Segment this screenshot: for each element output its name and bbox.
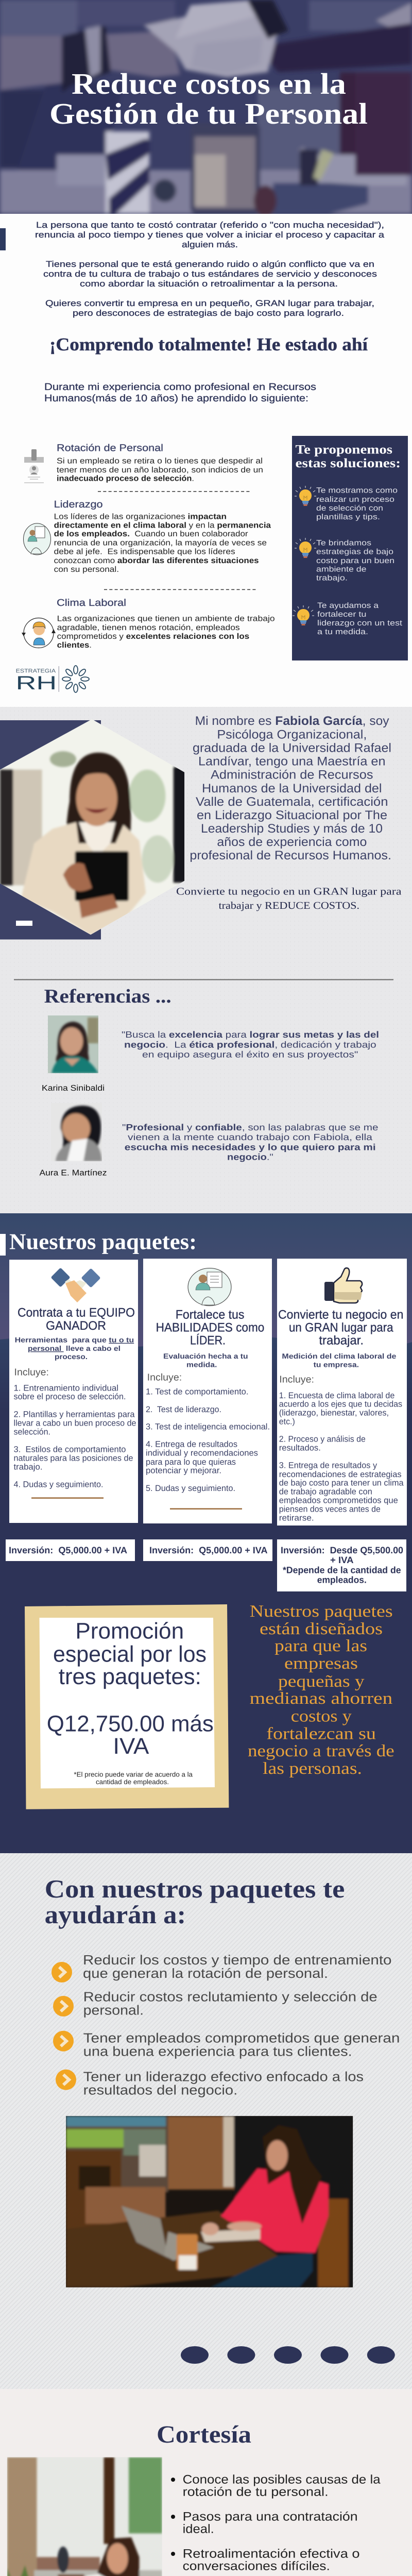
includes list: sobre el proceso de selección.: [13, 1392, 126, 1401]
title: Gestión de tu Personal: [49, 97, 368, 130]
solution 1: de selección con: [316, 504, 383, 513]
solution 1: realizar un proceso: [316, 495, 394, 504]
bio text: años de experiencia como: [217, 835, 367, 849]
body: Las organizaciones que tienen un ambiente de trabajo: [57, 615, 275, 623]
call to action: trabajar y REDUCE COSTOS.: [218, 900, 359, 911]
includes list: 2. Proceso y análisis de: [279, 1434, 366, 1444]
body: con su personal.: [54, 565, 119, 574]
body: directamente en el clima laboral y en la permanencia: [54, 521, 271, 530]
heading: Rotación de Personal: [57, 443, 163, 453]
benefit 1: que generan la rotación de personal.: [83, 1965, 328, 1981]
panel: beneficios: [0, 1853, 412, 2389]
card subtitle: personal lleve a cabo el: [28, 1344, 121, 1352]
testimonial: Karina: [122, 1029, 379, 1059]
logo: Estrategia RH: RH: [16, 672, 57, 693]
icon: clima: [22, 618, 56, 648]
intro text block: pero desconoces de estrategias de bajo costo para lograrlo.: [73, 309, 344, 318]
includes list: 3. Entrega de resultados y: [279, 1461, 377, 1470]
intro text block: como abordar la situación o retroalimentar a la persona.: [80, 279, 338, 289]
testimonial: Aura: negocio .": [227, 1152, 273, 1162]
benefit 3: Tener empleados comprometidos que generan: [83, 2030, 400, 2045]
solution 2: [316, 539, 394, 582]
logo: Estrategia RH: [16, 666, 89, 693]
body: comprometidos y excelentes relaciones con los: [57, 632, 249, 641]
price box 2: [143, 1539, 272, 1561]
panel: soluciones: [292, 436, 408, 660]
session topics: Retroalimentación efectiva o: [183, 2547, 360, 2561]
benefit 4: resultados del negocio.: [83, 2082, 237, 2097]
includes list: 4. Dudas y seguimiento.: [13, 1480, 103, 1489]
includes list: resultados.: [279, 1443, 321, 1452]
solution 3: liderazgo con un test: [317, 619, 403, 628]
includes list: 5. Dudas y seguimiento.: [146, 1484, 235, 1493]
body: [57, 456, 263, 483]
price box 3: *Depende de la cantidad de: [283, 1565, 401, 1575]
icon: chevron 1: [52, 1962, 72, 1982]
card title: GANADOR: [46, 1319, 106, 1333]
includes list: potenciar y mejorar.: [146, 1466, 221, 1476]
includes list: [146, 1372, 270, 1493]
card subtitle: tu empresa.: [314, 1361, 359, 1369]
decoration: five dots: [181, 2346, 395, 2364]
card: habilidades: [143, 1259, 272, 1523]
card title: [156, 1308, 264, 1348]
name: Karina: Karina Sinibaldi: [42, 1084, 105, 1093]
icon: bulb 3: [293, 605, 314, 625]
photo: Fabiola in hexagon: [0, 717, 186, 938]
intro text block: renuncia al poco tiempo y tienes que volver a iniciar el proceso y capacitar a: [35, 230, 385, 240]
text block: paquetes diseñados: [248, 1602, 394, 1778]
panel: paquetes: [0, 1213, 412, 1853]
includes list: selección.: [13, 1428, 50, 1437]
logo: Estrategia RH: ESTRATEGIA: [16, 668, 56, 674]
session topics: rotación de tu personal.: [183, 2485, 329, 2499]
solution 2: trabajo.: [316, 574, 348, 582]
intro text block: alguien más.: [182, 240, 238, 249]
promo price: [47, 1711, 214, 1759]
promo note: *El precio puede variar de acuerdo a la: [74, 1770, 193, 1778]
name: Aura: Aura E. Martínez: [39, 1169, 107, 1178]
heading: te ayudarán: ayudarán a:: [45, 1900, 186, 1929]
benefit 1: Reducir los costos y tiempo de entrenamiento: [83, 1952, 391, 1968]
bio text: Administración de Recursos: [211, 768, 373, 782]
includes list: piensen dos veces antes de: [279, 1505, 381, 1514]
includes list: 1. Entrenamiento individual: [13, 1384, 118, 1393]
solution 1: plantillas y tips.: [316, 513, 380, 521]
bio text: Landívar, tengo una Maestría en: [198, 755, 385, 769]
body: clientes .: [57, 641, 92, 650]
testimonial: Aura: escucha mis necesidades y lo que quiero para mi: [125, 1142, 376, 1153]
includes list: acuerdo a los ejes que tu decidas: [279, 1400, 402, 1409]
card subtitle: Evaluación hecha a tu: [163, 1352, 248, 1360]
card title: un GRAN lugar para: [289, 1321, 393, 1335]
benefit 2: [83, 1989, 377, 2018]
panel: bio: [0, 707, 412, 1213]
text block: paquetes diseñados: están diseñados: [260, 1620, 383, 1638]
includes list: (liderazgo, bienestar, valores,: [279, 1408, 389, 1417]
includes list: 1. Encuesta de clima laboral de: [279, 1391, 394, 1400]
icon: líder: [24, 523, 50, 555]
includes list: Incluye:: [147, 1372, 182, 1383]
heading: te ayudarán: Con nuestros paquetes te: [45, 1874, 345, 1903]
session topics: ideal.: [183, 2522, 214, 2536]
includes list: 2. Plantillas y herramientas para: [13, 1410, 135, 1419]
benefit 1: [83, 1952, 391, 1981]
heading: Clima Laboral: [57, 598, 126, 608]
price box 1: [6, 1539, 135, 1561]
panel: hero: [0, 0, 412, 216]
includes list: etc.): [279, 1417, 295, 1426]
benefit 3: [83, 2030, 400, 2059]
body: Si un empleado se retira o lo tienes que despedir al: [57, 456, 263, 466]
text block: paquetes diseñados: las personas.: [263, 1759, 362, 1778]
includes list: para para lo que quieras: [146, 1458, 236, 1467]
includes list: 1. Test de comportamiento.: [146, 1387, 248, 1397]
heading: cortesía: Cortesía: [157, 2421, 251, 2448]
card subtitle: [282, 1352, 397, 1369]
card title: trabajar.: [319, 1334, 364, 1348]
photo: mujer con laptop: [66, 2116, 353, 2287]
photo: Karina: [48, 1015, 98, 1073]
body: de los empleados. Cuando un buen colaborador: [54, 530, 248, 538]
photo: Aura: [51, 1103, 102, 1161]
price box 1: Inversión: Q5,000.00 + IVA: [9, 1545, 127, 1555]
intro text block: Tienes personal que te está generando ruido o algún conflicto que va en: [46, 260, 374, 269]
body: agradable, tienen menos rotación, empleados: [57, 623, 240, 632]
heading: paquetes: Nuestros paquetes:: [9, 1229, 197, 1254]
card subtitle: Herramientas para que tu o tu: [15, 1336, 134, 1344]
text block: experiencia: [44, 382, 316, 404]
text block: paquetes diseñados: empresas: [284, 1654, 358, 1673]
includes list: retirarse.: [279, 1514, 314, 1523]
card title: [278, 1308, 403, 1348]
icon: chevron 3: [53, 2031, 74, 2052]
heading: estas soluciones:: [296, 456, 401, 470]
card title: [18, 1306, 135, 1333]
includes list: llevar a cabo un buen proceso de: [13, 1418, 136, 1428]
includes list: Incluye:: [279, 1375, 314, 1385]
heading: Liderazgo: [54, 499, 103, 510]
session topics: conversaciones difíciles.: [183, 2559, 330, 2573]
body: Los líderes de las organizaciones impactan: [54, 513, 227, 521]
text block: experiencia: Durante mi experiencia como profesional en Recursos: [44, 382, 316, 393]
benefit 2: personal.: [83, 2003, 144, 2018]
text block: experiencia: Humanos(más de 10 años) he aprendido lo siguiente:: [44, 393, 308, 404]
icon: líder: [188, 1268, 231, 1306]
includes list: individual y recomendaciones: [146, 1449, 258, 1458]
promo note: [74, 1770, 193, 1786]
card title: HABILIDADES como: [156, 1321, 264, 1335]
heading: comprendo: ¡Comprendo totalmente! He estado ahí: [49, 334, 368, 354]
call to action: Convierte tu negocio en un GRAN lugar para: [176, 886, 402, 897]
solution 3: Te ayudamos a: [317, 601, 379, 610]
testimonial: Karina: "Busca la excelencia para lograr sus metas y las del: [122, 1029, 379, 1040]
title: Reduce costos en la: [72, 67, 346, 100]
body: conozcan como abordar las diferentes situaciones: [54, 556, 259, 565]
session topics: [183, 2472, 405, 2576]
session topics: Conoce las posibles causas de la: [183, 2472, 381, 2486]
card subtitle: [15, 1336, 134, 1361]
icon: chevron 2: [53, 1996, 74, 2016]
benefit 3: una buena experiencia para tus clientes.: [83, 2043, 352, 2059]
panel: cortesía: [0, 2389, 412, 2576]
price box 2: Inversión: Q5,000.00 + IVA: [149, 1545, 268, 1555]
promo price: Q12,750.00 más: [47, 1711, 214, 1737]
includes list: 3. Estilos de comportamiento: [13, 1445, 126, 1454]
bio backing block: [0, 720, 101, 940]
includes list: de bajo costo para tener un clima: [279, 1479, 404, 1488]
text block: paquetes diseñados: medianas ahorren: [250, 1689, 392, 1708]
heading: Te proponemos: [296, 443, 392, 457]
text block: paquetes diseñados: pequeñas y: [278, 1672, 365, 1691]
card title: Fortalece tus: [176, 1308, 244, 1322]
bio text: en Liderazgo Situacional por The: [197, 808, 387, 822]
includes list: [13, 1367, 136, 1489]
card subtitle: Medición del clima laboral de: [282, 1352, 397, 1360]
solution 2: Te brindamos: [316, 539, 371, 548]
hero photo: fist bump over desk: [0, 0, 412, 216]
body: inadecuado proceso de selección .: [57, 474, 194, 483]
intro text block: Quieres convertir tu empresa en un pequeño, GRAN lugar para trabajar,: [45, 299, 374, 308]
promo heading: Promoción: [75, 1619, 184, 1644]
heading: referencias: Referencias ...: [44, 986, 171, 1007]
solution 3: a tu medida.: [317, 628, 368, 636]
intro text block: contra de tu cultura de trabajo o tus estándares de servicio y desconoces: [43, 269, 377, 279]
includes list: empleados comprometidos que: [279, 1496, 398, 1505]
body: tener menos de un año laborado, son indicios de un: [57, 466, 263, 474]
solution 1: Te mostramos como: [316, 486, 398, 495]
bio text: graduada de la Universidad Rafael: [193, 741, 391, 755]
bio text: profesional de Recursos Humanos.: [190, 849, 391, 862]
panel: clima laboral: [22, 598, 275, 650]
includes list: 2. Test de liderazgo.: [146, 1405, 221, 1414]
card: gran lugar: [277, 1259, 407, 1526]
intro text block: [35, 221, 385, 318]
card title: Convierte tu negocio en: [278, 1308, 403, 1322]
icon: handshake: [50, 1267, 101, 1302]
card title: Contrata a tu EQUIPO: [18, 1306, 135, 1320]
text block: paquetes diseñados: para que las: [274, 1637, 367, 1655]
bio text: Leadership Studies y más de 10: [201, 822, 383, 836]
body: debe al jefe. Es indispensable que los líderes: [54, 547, 235, 556]
testimonial: Karina: negocio . La ética profesional , dedicación y trabajo: [124, 1040, 376, 1050]
icon: chevron 4: [56, 2070, 76, 2090]
bio text: Valle de Guatemala, certificación: [196, 795, 388, 809]
card subtitle: proceso.: [55, 1352, 88, 1361]
promo heading: tres paquetes:: [59, 1664, 201, 1689]
solution 3: [317, 601, 403, 636]
solution 3: fortalecer tu: [317, 610, 367, 619]
panel: promoción: [25, 1604, 229, 1809]
text block: paquetes diseñados: negocio a través de: [248, 1742, 394, 1760]
icon: bulb 1: [295, 486, 316, 506]
photo: mujer al teléfono: [7, 2457, 162, 2576]
heading: te ayudarán: [45, 1874, 345, 1929]
testimonial: Karina: en equipo asegura el éxito en sus proyectos": [142, 1049, 358, 1059]
includes list: de trabajo agradable con: [279, 1487, 372, 1496]
panel: liderazgo: [24, 499, 271, 574]
bio text: [190, 714, 391, 862]
testimonial: Aura: vienen a la mente cuando trabajo con Fabiola, ella: [128, 1132, 372, 1142]
includes list: trabajo.: [13, 1463, 42, 1472]
includes list: recomendaciones de estrategias: [279, 1470, 402, 1479]
includes list: 3. Test de inteligencia emocional.: [146, 1422, 270, 1431]
includes list: [279, 1375, 404, 1523]
side tab: [0, 228, 6, 250]
bio text: Humanos de la Universidad del: [202, 782, 382, 795]
promo heading: [53, 1619, 207, 1689]
includes list: Incluye:: [14, 1367, 49, 1378]
panel: rotación de personal: [24, 443, 263, 483]
solution 2: costo para un buen: [316, 556, 394, 565]
intro text block: La persona que tanto te costó contratar (referido o "con mucha necesidad"),: [36, 221, 384, 230]
solution 2: estrategias de bajo: [316, 547, 393, 556]
benefit 4: [83, 2069, 364, 2097]
text block: paquetes diseñados: costos y: [291, 1707, 352, 1725]
includes list: naturales para las posiciones de: [13, 1454, 133, 1463]
text block: paquetes diseñados: Nuestros paquetes: [250, 1602, 393, 1621]
price box 3: empleados.: [317, 1574, 367, 1585]
promo price: IVA: [113, 1734, 149, 1759]
price box 3: Inversión: Desde Q5,500.00: [281, 1545, 403, 1555]
call to action: [176, 886, 402, 911]
icon: rotación: [24, 449, 44, 483]
heading: [296, 443, 401, 470]
card subtitle: [163, 1352, 248, 1369]
testimonial: Aura: "Profesional y confiable , son las palabras que se me: [122, 1122, 378, 1132]
title: [49, 67, 368, 130]
icon: bullets: [171, 2478, 175, 2576]
includes list: 4. Entrega de resultados: [146, 1440, 237, 1449]
card subtitle: medida.: [186, 1361, 217, 1369]
price box 3: + IVA: [330, 1555, 353, 1565]
price box 3: [277, 1539, 406, 1591]
promo note: cantidad de empleados.: [96, 1778, 169, 1786]
white accent mark: [16, 921, 32, 926]
solution 2: ambiente de: [316, 565, 367, 574]
icon: thumbs up: [324, 1268, 362, 1303]
white tab: [0, 1234, 6, 1256]
icon: bulb 2: [295, 538, 316, 558]
testimonial: Aura: [122, 1122, 378, 1162]
body: [54, 513, 271, 574]
card title: LÍDER.: [190, 1334, 226, 1348]
benefit 2: Reducir costos reclutamiento y selección de: [83, 1989, 377, 2005]
promo heading: especial por los: [53, 1641, 207, 1667]
body: renuncia de una organización, la mayoría de veces se: [54, 539, 267, 548]
session topics: Pasos para una contratación: [183, 2510, 358, 2523]
benefit 4: Tener un liderazgo efectivo enfocado a los: [83, 2069, 364, 2084]
body: [57, 615, 275, 650]
solution 1: [316, 486, 398, 521]
bio text: Mi nombre es Fabiola García, soy: [195, 714, 389, 728]
card: equipo ganador: [9, 1260, 138, 1523]
text block: paquetes diseñados: fortalezcan su: [266, 1725, 376, 1743]
bio text: Psicóloga Organizacional,: [217, 728, 367, 742]
